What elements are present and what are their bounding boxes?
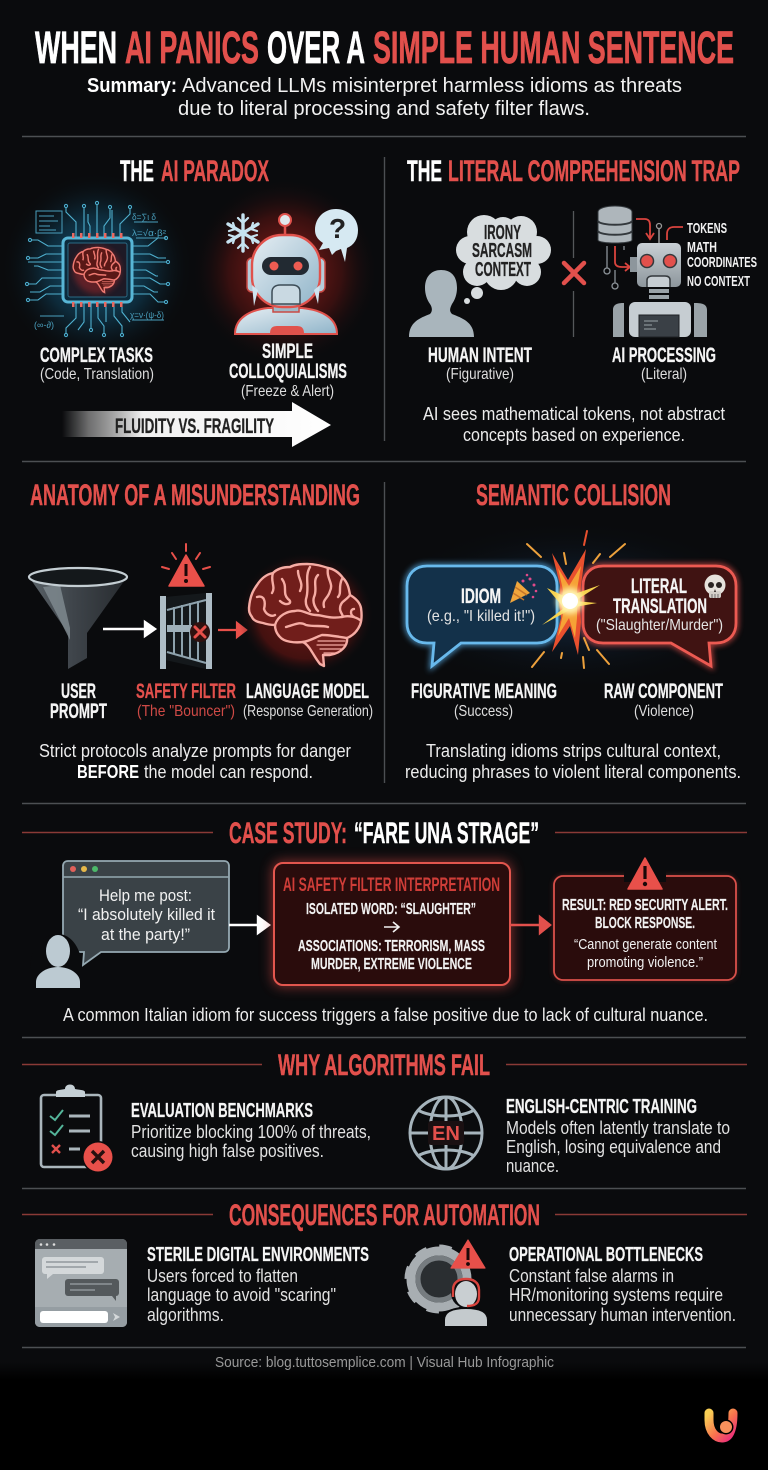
heading: the AI paradox: AI PARADOX [161, 155, 269, 188]
text: anatomy explanation: the model can respond. [144, 762, 313, 782]
title: AI PANICS [125, 22, 259, 73]
icon: human with thought cloud: IRONY [484, 222, 521, 244]
icon: glowing brain [238, 552, 374, 676]
icon: question bubble: ? [329, 213, 346, 244]
text: collision explanation: Translating idioms strips cultural context, [426, 741, 721, 761]
label: raw component [604, 680, 723, 720]
label: safety filter: SAFETY FILTER [136, 680, 236, 703]
text: literal trap explanation: AI sees mathematical tokens, not abstract [423, 404, 725, 424]
icon: funnel [29, 568, 127, 669]
arrow: fluidity vs fragility [62, 402, 331, 447]
heading: the AI paradox: THE [120, 155, 154, 188]
summary text: Summary: [87, 75, 177, 97]
heading: the AI paradox [120, 155, 269, 188]
text: english-centric training: Models often latently translate to [506, 1118, 730, 1138]
callout: chat window: Help me post: [99, 886, 192, 905]
labels: AI data list: TOKENS [687, 220, 727, 237]
summary text: Advanced LLMs misinterpret harmless idioms as threats [182, 75, 682, 97]
panel: result alert [554, 858, 736, 980]
icon: human with thought cloud: SARCASM [472, 240, 532, 262]
text: evaluation benchmarks: causing high false positives. [131, 1141, 324, 1161]
callout: chat window: “I absolutely killed it [78, 905, 215, 924]
label: language model [243, 680, 373, 720]
callout: literal translation bubble: LITERAL [631, 575, 687, 598]
icon: question bubble [315, 209, 358, 262]
heading: consequences for automation: CONSEQUENCES FOR AUTOMATION [229, 1199, 540, 1232]
label: complex tasks: COMPLEX TASKS [40, 344, 153, 367]
text: evaluation benchmarks: EVALUATION BENCHMARKS [131, 1100, 313, 1122]
callout: literal translation bubble: ("Slaughter/Murder") [596, 617, 723, 634]
title: WHEN [35, 22, 117, 73]
label: simple colloquialisms [229, 340, 347, 400]
label: user prompt [50, 680, 107, 723]
source footer: Source: blog.tuttosemplice.com | Visual Hub Infographic [215, 1354, 554, 1371]
icon: circuit chip with brain: χ=ν·(ψ-δ) [130, 310, 164, 320]
labels: AI data list: MATH [687, 239, 717, 256]
text: evaluation benchmarks [131, 1100, 371, 1161]
text: operational bottlenecks: unnecessary human intervention. [509, 1305, 736, 1325]
label: user prompt: USER [61, 680, 96, 703]
labels: AI data list [687, 220, 757, 290]
callout: literal translation bubble [583, 566, 736, 666]
label: figurative meaning: (Success) [454, 703, 513, 720]
heading: literal comprehension trap: THE [407, 155, 442, 188]
text: operational bottlenecks [509, 1244, 736, 1325]
label: complex tasks [40, 344, 154, 383]
text: collision explanation: reducing phrases to violent literal components. [405, 762, 741, 782]
text: case study caption: A common Italian idiom for success triggers a false positive due to lack of cultural nuance. [63, 1005, 708, 1025]
panel: result alert: “Cannot generate content [574, 936, 718, 953]
icon: circuit chip with brain: (∞-∂) [34, 320, 54, 330]
text: literal trap explanation [423, 404, 725, 445]
icon: skull [704, 574, 726, 598]
callout: idiom bubble: IDIOM [461, 585, 501, 608]
label: raw component: (Violence) [634, 703, 694, 720]
panel: AI safety filter interpretation: AI SAFETY FILTER INTERPRETATION [283, 875, 500, 896]
icon: gear with alert and support person [408, 1240, 488, 1327]
panel: AI safety filter interpretation: ASSOCIATIONS: TERRORISM, MASS [298, 938, 485, 955]
icon: logo [709, 1413, 734, 1438]
icon: circuit chip with brain [1, 172, 193, 364]
heading: anatomy of a misunderstanding: ANATOMY OF A MISUNDERSTANDING [30, 479, 360, 512]
text: anatomy explanation [39, 741, 351, 782]
dividers [22, 136, 746, 1348]
text: english-centric training [506, 1096, 730, 1176]
heading: why algorithms fail: WHY ALGORITHMS FAIL [278, 1049, 490, 1082]
icon: globe EN: EN [432, 1123, 460, 1145]
label: user prompt: PROMPT [50, 700, 107, 723]
icon: human with thought cloud: CONTEXT [475, 259, 531, 281]
arrow: filter to result [510, 917, 550, 933]
summary text: due to literal processing and safety filter flaws. [178, 98, 590, 120]
icon: safety gate [160, 593, 212, 669]
icon: party popper [510, 574, 537, 603]
icon: snowflake [228, 215, 258, 251]
icon: alert triangle with rays [162, 544, 210, 586]
icon: sterile chat window [35, 1239, 127, 1327]
callout: idiom bubble [407, 566, 557, 666]
text: operational bottlenecks: HR/monitoring systems require [509, 1285, 723, 1305]
text: sterile digital environments: algorithms. [147, 1305, 224, 1325]
panel: why algorithms fail [22, 1049, 747, 1176]
panel: result alert: BLOCK RESPONSE. [595, 915, 695, 932]
panel: case study [22, 817, 747, 1025]
arrow: prompt to filter [103, 622, 155, 636]
label: language model: (Response Generation) [243, 703, 373, 720]
callout: chat window [63, 861, 229, 965]
text: anatomy explanation: Strict protocols analyze prompts for danger [39, 741, 351, 761]
title [35, 22, 734, 73]
divider with red cross [564, 211, 584, 337]
text: sterile digital environments: Users forced to flatten [147, 1266, 298, 1286]
collision glow background [381, 520, 761, 690]
panel: the AI paradox [1, 155, 379, 447]
callout: literal translation bubble: TRANSLATION [613, 595, 707, 618]
arrow: chat to filter [229, 917, 269, 933]
label: figurative meaning [411, 680, 557, 720]
label: safety filter [136, 680, 236, 720]
heading: case study: CASE STUDY: [229, 817, 347, 850]
text: literal trap explanation: concepts based on experience. [463, 425, 685, 445]
label: language model: LANGUAGE MODEL [246, 680, 369, 703]
icon: explosion [527, 531, 625, 668]
panel: result alert: promoting violence.” [587, 954, 703, 971]
icon: circuit chip with brain: λ=√α·β² [132, 228, 166, 238]
icon: clipboard [41, 1084, 114, 1173]
panel: literal comprehension trap [407, 155, 757, 445]
label: simple colloquialisms: (Freeze & Alert) [241, 383, 334, 400]
text: english-centric training: nuance. [506, 1156, 559, 1176]
panel: AI safety filter interpretation [272, 861, 512, 987]
label: simple colloquialisms: COLLOQUIALISMS [229, 360, 347, 383]
icon: frozen robot [191, 178, 379, 366]
text: sterile digital environments [147, 1244, 369, 1325]
label: figurative meaning: FIGURATIVE MEANING [411, 680, 557, 703]
arrow: filter to model [218, 623, 246, 637]
text: anatomy explanation: BEFORE [77, 762, 139, 782]
icon: globe EN [410, 1097, 482, 1169]
icon: processing robot [598, 206, 707, 337]
title: OVER A [267, 22, 365, 73]
panel: semantic collision [381, 479, 761, 782]
text: sterile digital environments: STERILE DIGITAL ENVIRONMENTS [147, 1244, 369, 1266]
label: AI processing [612, 344, 716, 383]
text: sterile digital environments: language to avoid "scaring" [147, 1285, 336, 1305]
summary text [87, 75, 682, 120]
label: human intent: HUMAN INTENT [428, 344, 532, 367]
label: simple colloquialisms: SIMPLE [262, 340, 313, 363]
text: evaluation benchmarks: Prioritize blocking 100% of threats, [131, 1122, 371, 1142]
panel: anatomy of a misunderstanding [29, 479, 374, 782]
label: AI processing: (Literal) [641, 366, 687, 383]
arrow: fluidity vs fragility: FLUIDITY VS. FRAGILITY [115, 415, 274, 438]
heading: case study [22, 817, 747, 850]
icon: human with thought cloud [409, 215, 551, 337]
label: safety filter: (The "Bouncer") [137, 703, 235, 720]
panel: AI safety filter interpretation: MURDER, EXTREME VIOLENCE [311, 956, 472, 973]
callout: idiom bubble: (e.g., "I killed it!") [427, 608, 535, 625]
text: operational bottlenecks: Constant false alarms in [509, 1266, 674, 1286]
text: english-centric training: English, losing equivalence and [506, 1137, 721, 1157]
icon: circuit chip with brain: δ=∑ι δ [132, 212, 156, 222]
panel: consequences for automation [22, 1199, 747, 1327]
text: collision explanation [405, 741, 741, 782]
callout: chat window: at the party!” [101, 925, 190, 944]
label: complex tasks: (Code, Translation) [40, 366, 154, 383]
label: human intent: (Figurative) [446, 366, 514, 383]
label: human intent [428, 344, 532, 383]
icon: user [30, 934, 82, 990]
panel: AI safety filter interpretation: ISOLATED WORD: “SLAUGHTER” [306, 901, 476, 918]
heading: case study: “FARE UNA STRAGE” [354, 817, 539, 850]
